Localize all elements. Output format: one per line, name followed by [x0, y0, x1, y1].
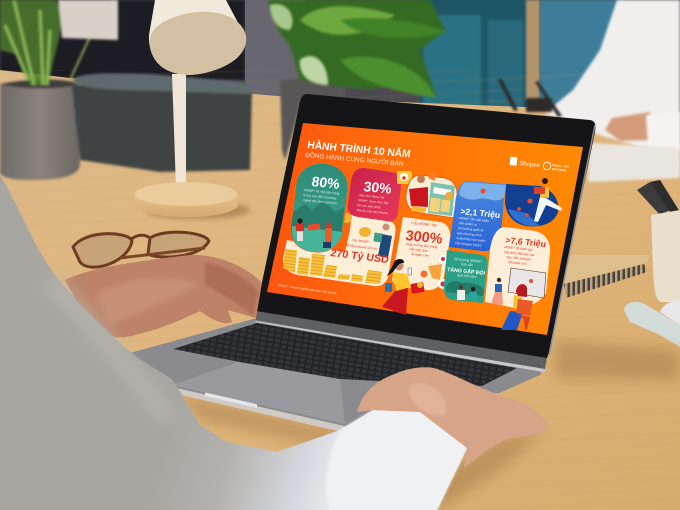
panel: 300 percent: 300%: [404, 228, 444, 248]
panel: 30 percent red: 30%: [363, 178, 393, 197]
white lampshade in background: [58, 0, 118, 40]
mountains: [291, 200, 344, 252]
panel: 30 percent red: bởi các Giải pháp: [357, 203, 381, 209]
panel: 30 percent red: Tiếp thị Liên kết Shopee: [356, 208, 389, 215]
footnote: MSME* = Doanh nghiệp siêu nhỏ, nhỏ và vừa: [278, 283, 337, 295]
birthday logo: BIRTHDAY: [552, 167, 567, 172]
panel: 300 percent: Shopee Live: [411, 252, 429, 258]
delivery people: [296, 218, 332, 248]
panel: tang gap doi green: Số lượng MSME*: [454, 257, 483, 264]
panel: 300 percent: mỗi năm qua: [409, 246, 428, 253]
panel: 7.6 million cream: Học Viện Shopee: [506, 255, 531, 261]
presenter: [491, 278, 503, 305]
seated person: [501, 284, 533, 330]
panel: dark blue map with running woman: [505, 178, 562, 226]
person sleeve: [0, 175, 467, 510]
person with tablet: [373, 224, 392, 258]
panel: 2.1 million blue: MSME* đã xuất khẩu: [459, 216, 489, 223]
people: [459, 285, 463, 289]
panel: 7.6 million cream: [485, 227, 550, 330]
description: MSME* tại nhà bán hàng: [304, 188, 340, 196]
panel: 2.1 million blue: thị trường quốc tế: [458, 226, 484, 233]
laptop base: [130, 318, 547, 436]
person left hand: [65, 255, 262, 338]
desk lamp: [135, 0, 250, 219]
runner: [534, 197, 562, 222]
panel: 270 Ty USD revenue: [283, 213, 395, 286]
notebook: [555, 255, 650, 298]
coin icons: [340, 213, 352, 223]
panel: 2.1 million blue: của Shopee (SEP): [455, 241, 482, 248]
white shirt person in background: [545, 0, 680, 150]
subtitle: ĐỒNG HÀNH CÙNG NGƯỜI BÁN: [305, 149, 405, 168]
panel: tang gap doi green: TĂNG GẤP ĐÔI: [447, 265, 486, 277]
icon: map pin: [480, 188, 486, 194]
panel: 7.6 million cream: các khóa đào tạo của: [504, 250, 535, 257]
shirt cuff: [326, 410, 467, 510]
panel: 7.6 million cream: >7,6 Triệu: [505, 235, 547, 249]
panel: tang gap doi green: qua mỗi năm: [457, 272, 477, 279]
panel: 2.1 million blue: qua chương trình: [457, 231, 482, 237]
panel: 7.6 million cream: MSME* đã tham gia: [504, 245, 533, 252]
whiteboard: [508, 268, 546, 298]
panel: 2.1 million blue: Xuất khẩu trực tuyến: [456, 236, 486, 243]
panel: 80 percent green blob: ở khu vực đến phương: [303, 193, 336, 200]
panel: 2.1 million blue: >2,1 Triệu: [460, 206, 501, 220]
storefront: [428, 182, 455, 216]
person right hand: [357, 367, 548, 468]
panel: tang gap doi green: [444, 250, 487, 303]
cable box: [72, 73, 252, 172]
panel: 2.1 million blue: [449, 181, 506, 251]
caption: Các MSME*: [352, 238, 371, 244]
panel: 80 percent green blob: [291, 163, 348, 252]
icon: megaphone and gifts: [410, 264, 442, 294]
panel: 30 percent red: MSME* được thúc đẩy: [358, 198, 389, 205]
background pens: [498, 78, 562, 117]
left plant and pot: [0, 0, 115, 180]
megaphone: [428, 172, 435, 181]
Shopee logo: Shopee: [519, 161, 541, 169]
woman with phone: [382, 259, 412, 315]
pen cup: [637, 180, 680, 302]
infographic screen: [267, 123, 583, 335]
paper on desk: [588, 143, 680, 182]
icon: emoji chat bubble: [397, 171, 412, 184]
laptop lid: [255, 94, 595, 372]
birthday logo: [543, 162, 570, 172]
screen background: [267, 123, 583, 335]
white marker: [624, 300, 680, 347]
panel: 7.6 million cream: (Shopee Uni): [508, 260, 527, 266]
birthday logo: Shopee 10th: [552, 163, 570, 169]
icon: hearts: [438, 255, 448, 289]
panel: 2.1 million blue: sản phẩm ra: [459, 221, 477, 227]
panel: seller illustration circle: [406, 172, 457, 218]
background wall and office: [0, 0, 680, 150]
panel: 30 percent red: [348, 168, 412, 222]
shadows on desk around laptop: [175, 340, 680, 510]
right plant and pot: [268, 0, 447, 160]
panel: 270 Ty USD revenue: đạt tổng doanh số hơn: [345, 243, 378, 251]
panel: tang gap doi green: bán sẵn: [461, 261, 474, 267]
coin bars chart: [283, 249, 382, 284]
panel: 300 percent: Các MSME* đạt: [411, 221, 437, 228]
keyboard: [173, 323, 517, 386]
percent: 80%: [311, 173, 341, 192]
seller man: [409, 175, 428, 213]
big number: 270 Tỷ USD: [329, 247, 390, 266]
panel: 30 percent red: tăng đơn hàng của: [359, 193, 385, 200]
title: HÀNH TRÌNH 10 NĂM: [307, 138, 412, 160]
panel: 300 percent: [392, 217, 450, 294]
panel: 80 percent green blob: ngoại các thành phố lớn: [303, 198, 338, 205]
panel: 300 percent: tăng trưởng đơn hàng: [406, 242, 438, 249]
glasses on desk: [73, 232, 209, 267]
Shopee logo: [510, 157, 541, 169]
